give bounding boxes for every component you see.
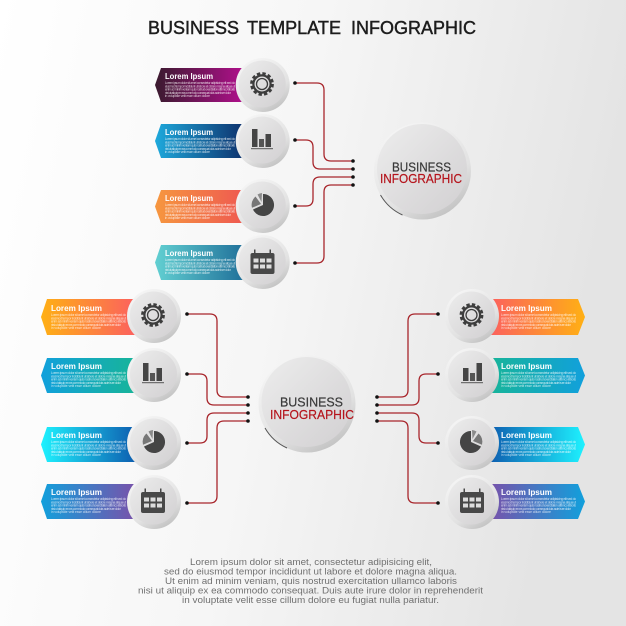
item: gear banner right	[445, 289, 585, 343]
item: pie chart banner left: eiusmod tempor incididunt ut labore et dolore magna aliqua ut	[51, 443, 126, 447]
title	[148, 17, 476, 38]
item: calendar banner top: Lorem ipsum dolor sit amet consectetur adipisicing elit sed do	[165, 258, 235, 262]
item: calendar banner top: in voluptate velit esse cillum dolore	[165, 271, 210, 275]
panel: bottom left group	[41, 289, 250, 529]
item: pie chart banner right: nisi ut aliquip ex ea commodo consequat duis aute irure dolor	[501, 450, 572, 454]
item: pie chart banner right: in voluptate velit esse cillum dolore	[501, 453, 551, 457]
item: calendar banner right: Lorem ipsum dolor sit amet consectetur adipisicing elit sed do	[501, 497, 576, 501]
item: pie chart banner left: Lorem ipsum dolor sit amet consectetur adipisicing elit sed do	[51, 440, 126, 444]
item: gear banner top: in voluptate velit esse cillum dolore	[165, 94, 210, 98]
item: pie chart banner right: eiusmod tempor incididunt ut labore et dolore magna aliqua ut	[501, 443, 576, 447]
item: gear banner right: eiusmod tempor incididunt ut labore et dolore magna aliqua ut	[501, 316, 576, 320]
item: gear banner left: in voluptate velit esse cillum dolore	[51, 326, 101, 330]
item: bar chart banner top	[155, 114, 290, 168]
item: pie chart banner top	[155, 179, 290, 233]
item: calendar banner right: nisi ut aliquip ex ea commodo consequat duis aute irure dolor	[501, 507, 572, 511]
item: gear banner top: Lorem Ipsum	[165, 71, 213, 81]
item: pie chart banner top: in voluptate velit esse cillum dolore	[165, 216, 210, 220]
item: pie chart banner left: Lorem Ipsum	[51, 430, 102, 440]
item: gear banner left	[41, 289, 181, 343]
item: pie chart banner left: in voluptate velit esse cillum dolore	[51, 453, 101, 457]
item: pie chart banner right	[445, 416, 585, 470]
item: bar chart banner top: eiusmod tempor incididunt ut labore et dolore magna aliqua ut	[165, 140, 235, 144]
item: calendar banner left: Lorem Ipsum	[51, 487, 102, 497]
item: bar chart banner right	[445, 348, 585, 402]
item: pie chart banner left: enim ad minim veniam quis nostrud exercitation ullamco laboris	[51, 447, 126, 451]
central circle bottom: BUSINESS	[280, 394, 343, 410]
title: BUSINESS	[148, 17, 239, 38]
item: gear banner right: Lorem ipsum dolor sit amet consectetur adipisicing elit sed do	[501, 313, 576, 317]
item: calendar banner left	[41, 475, 181, 529]
item: bar chart banner top: nisi ut aliquip ex ea commodo consequat duis aute irure dolor	[165, 147, 232, 151]
item: calendar banner top: Lorem Ipsum	[165, 248, 213, 258]
item: calendar banner top: enim ad minim veniam quis nostrud exercitation ullamco laboris	[165, 265, 235, 269]
item: calendar banner right: Lorem Ipsum	[501, 487, 552, 497]
item: bar chart banner top: in voluptate velit esse cillum dolore	[165, 150, 210, 154]
item: gear banner left: Lorem Ipsum	[51, 303, 102, 313]
item: bar chart banner left: in voluptate velit esse cillum dolore	[51, 384, 101, 388]
item: pie chart banner top: Lorem ipsum dolor sit amet consectetur adipisicing elit sed do	[165, 203, 235, 207]
panel: bottom right group	[375, 289, 585, 529]
item: gear banner top: eiusmod tempor incididunt ut labore et dolore magna aliqua ut	[165, 84, 235, 88]
item: pie chart banner top: nisi ut aliquip ex ea commodo consequat duis aute irure dolor	[165, 213, 232, 217]
item: calendar banner left: eiusmod tempor incididunt ut labore et dolore magna aliqua ut	[51, 500, 126, 504]
item: pie chart banner right: enim ad minim veniam quis nostrud exercitation ullamco laboris	[501, 447, 576, 451]
item: gear banner right: Lorem Ipsum	[501, 303, 552, 313]
item: pie chart banner left	[41, 416, 181, 470]
item: bar chart banner left	[41, 348, 181, 402]
item: gear banner right: enim ad minim veniam quis nostrud exercitation ullamco laboris	[501, 320, 576, 324]
item: bar chart banner top: Lorem Ipsum	[165, 127, 213, 137]
central circle bottom	[258, 356, 356, 452]
item: calendar banner right: enim ad minim veniam quis nostrud exercitation ullamco laboris	[501, 504, 576, 508]
footer text block: Ut enim ad minim veniam, quis nostrud exercitation ullamco laboris	[165, 576, 457, 586]
item: bar chart banner left: nisi ut aliquip ex ea commodo consequat duis aute irure dolor	[51, 381, 122, 385]
item: calendar banner left: in voluptate velit esse cillum dolore	[51, 510, 101, 514]
panel: top group	[155, 58, 471, 289]
item: bar chart banner right: nisi ut aliquip ex ea commodo consequat duis aute irure dolor	[501, 381, 572, 385]
item: pie chart banner top: eiusmod tempor incididunt ut labore et dolore magna aliqua ut	[165, 206, 235, 210]
item: pie chart banner right: Lorem Ipsum	[501, 430, 552, 440]
item: pie chart banner top: Lorem Ipsum	[165, 193, 213, 203]
footer text block: sed do eiusmod tempor incididunt ut labore et dolore magna aliqua.	[164, 566, 457, 576]
item: calendar banner right: in voluptate velit esse cillum dolore	[501, 510, 551, 514]
item: calendar banner top: eiusmod tempor incididunt ut labore et dolore magna aliqua ut	[165, 261, 235, 265]
item: calendar banner left: enim ad minim veniam quis nostrud exercitation ullamco laboris	[51, 504, 126, 508]
item: bar chart banner right: eiusmod tempor incididunt ut labore et dolore magna aliqua ut	[501, 374, 576, 378]
item: pie chart banner left: nisi ut aliquip ex ea commodo consequat duis aute irure dolor	[51, 450, 122, 454]
footer text block: Lorem ipsum dolor sit amet, consectetur adipisicing elit,	[190, 557, 432, 567]
item: gear banner top: enim ad minim veniam quis nostrud exercitation ullamco laboris	[165, 88, 235, 92]
item: calendar banner top: nisi ut aliquip ex ea commodo consequat duis aute irure dolor	[165, 268, 232, 272]
item: gear banner top	[155, 58, 290, 112]
item: gear banner top: Lorem ipsum dolor sit amet consectetur adipisicing elit sed do	[165, 81, 235, 85]
item: gear banner left: eiusmod tempor incididunt ut labore et dolore magna aliqua ut	[51, 316, 126, 320]
item: calendar banner right: eiusmod tempor incididunt ut labore et dolore magna aliqua ut	[501, 500, 576, 504]
central circle top: BUSINESS	[392, 160, 451, 174]
title: INFOGRAPHIC	[351, 17, 476, 38]
item: bar chart banner left: Lorem Ipsum	[51, 361, 102, 371]
item: bar chart banner top: enim ad minim veniam quis nostrud exercitation ullamco laboris	[165, 144, 235, 148]
footer text block: in voluptate velit esse cillum dolore eu fugiat nulla pariatur.	[182, 595, 439, 605]
central circle top	[374, 122, 471, 220]
connector lines top	[293, 81, 355, 265]
item: gear banner right: nisi ut aliquip ex ea commodo consequat duis aute irure dolor	[501, 323, 572, 327]
title: TEMPLATE	[247, 17, 341, 38]
item: gear banner left: enim ad minim veniam quis nostrud exercitation ullamco laboris	[51, 320, 126, 324]
item: calendar banner left: nisi ut aliquip ex ea commodo consequat duis aute irure dolor	[51, 507, 122, 511]
item: bar chart banner top: Lorem ipsum dolor sit amet consectetur adipisicing elit sed do	[165, 137, 235, 141]
connector lines right	[375, 312, 440, 505]
item: calendar banner left: Lorem ipsum dolor sit amet consectetur adipisicing elit sed do	[51, 497, 126, 501]
item: bar chart banner right: Lorem Ipsum	[501, 361, 552, 371]
item: gear banner left: Lorem ipsum dolor sit amet consectetur adipisicing elit sed do	[51, 313, 126, 317]
item: gear banner left: nisi ut aliquip ex ea commodo consequat duis aute irure dolor	[51, 323, 122, 327]
central circle top: INFOGRAPHIC	[380, 172, 462, 186]
central circle bottom: INFOGRAPHIC	[270, 407, 354, 422]
item: bar chart banner left: Lorem ipsum dolor sit amet consectetur adipisicing elit sed do	[51, 371, 126, 375]
item: bar chart banner right: in voluptate velit esse cillum dolore	[501, 384, 551, 388]
item: bar chart banner left: eiusmod tempor incididunt ut labore et dolore magna aliqua ut	[51, 374, 126, 378]
item: pie chart banner top: enim ad minim veniam quis nostrud exercitation ullamco laboris	[165, 210, 235, 214]
item: bar chart banner left: enim ad minim veniam quis nostrud exercitation ullamco laboris	[51, 378, 126, 382]
item: calendar banner top	[155, 235, 290, 289]
item: bar chart banner right: Lorem ipsum dolor sit amet consectetur adipisicing elit sed do	[501, 371, 576, 375]
item: gear banner right: in voluptate velit esse cillum dolore	[501, 326, 551, 330]
item: bar chart banner right: enim ad minim veniam quis nostrud exercitation ullamco laboris	[501, 378, 576, 382]
item: gear banner top: nisi ut aliquip ex ea commodo consequat duis aute irure dolor	[165, 91, 232, 95]
item: pie chart banner right: Lorem ipsum dolor sit amet consectetur adipisicing elit sed do	[501, 440, 576, 444]
connector lines left	[185, 312, 250, 505]
footer text block: nisi ut aliquip ex ea commodo consequat. Duis aute irure dolor in reprehenderit	[138, 586, 483, 596]
footer text block	[138, 557, 483, 605]
item: calendar banner right	[445, 475, 585, 529]
